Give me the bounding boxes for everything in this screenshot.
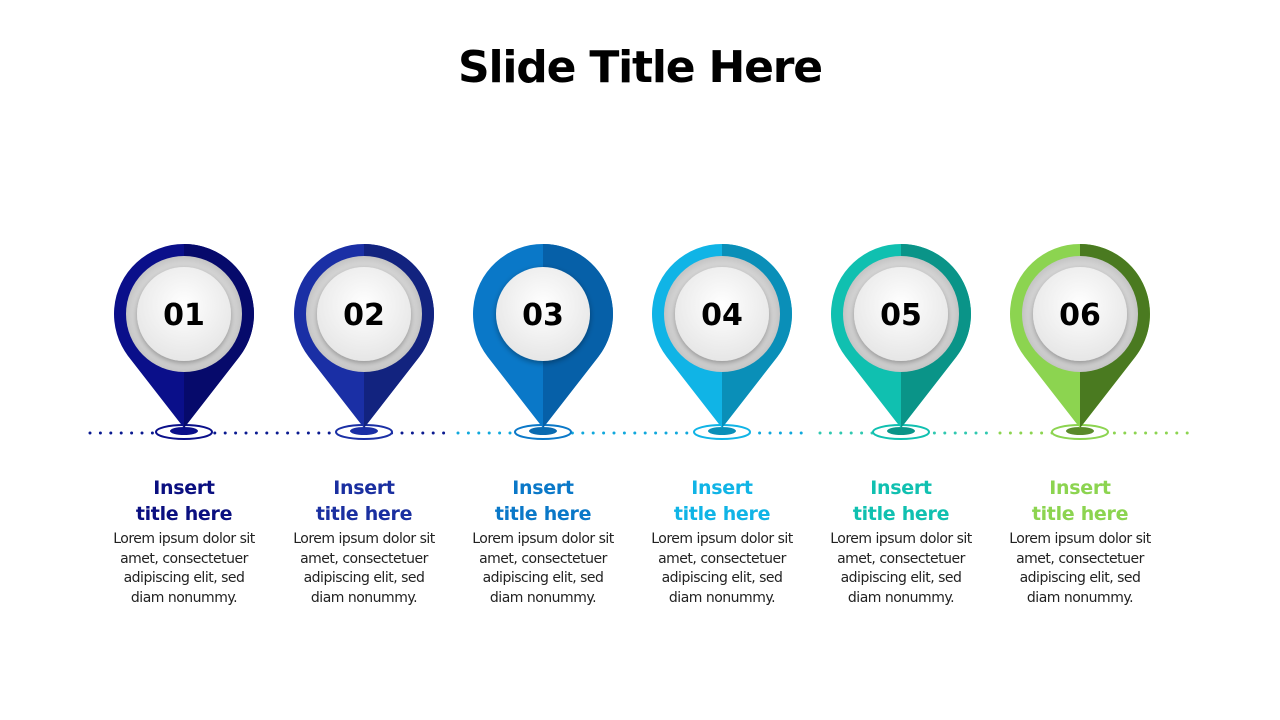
dotted line — [90, 432, 1192, 434]
pin 04 — [652, 244, 792, 439]
text block 02: Lorem ipsum dolor sit amet, consectetuer adipiscing elit, sed diam nonummy. — [293, 531, 435, 606]
text block 02: title here — [316, 503, 412, 525]
title: Slide Title Here — [458, 42, 822, 93]
text block 06: Insert — [1049, 477, 1111, 499]
text block 01: title here — [136, 503, 232, 525]
text block 03: title here — [495, 503, 591, 525]
text block 02: Insert — [333, 477, 395, 499]
pin 02 — [294, 244, 434, 439]
text block 01: Insert — [153, 477, 215, 499]
text block 03 — [472, 477, 614, 606]
text block 04: Lorem ipsum dolor sit amet, consectetuer adipiscing elit, sed diam nonummy. — [651, 531, 793, 606]
pin 04: 04 — [701, 298, 743, 333]
text block 06: title here — [1032, 503, 1128, 525]
pin 06: 06 — [1059, 298, 1101, 333]
pin 02: 02 — [343, 298, 385, 333]
text block 05 — [830, 477, 972, 606]
text block 01: Lorem ipsum dolor sit amet, consectetuer adipiscing elit, sed diam nonummy. — [113, 531, 255, 606]
pin 05 — [831, 244, 971, 439]
text block 04: Insert — [691, 477, 753, 499]
text block 05: Insert — [870, 477, 932, 499]
text block 06 — [1009, 477, 1151, 606]
text block 04: title here — [674, 503, 770, 525]
pin 06 — [1010, 244, 1150, 439]
pin 01: 01 — [163, 298, 205, 333]
text block 04 — [651, 477, 793, 606]
pin 03 — [473, 244, 613, 439]
text block 06: Lorem ipsum dolor sit amet, consectetuer adipiscing elit, sed diam nonummy. — [1009, 531, 1151, 606]
text block 01 — [113, 477, 255, 606]
pin 05: 05 — [880, 298, 922, 333]
text block 03: Insert — [512, 477, 574, 499]
text block 02 — [293, 477, 435, 606]
text block 03: Lorem ipsum dolor sit amet, consectetuer adipiscing elit, sed diam nonummy. — [472, 531, 614, 606]
pin 03: 03 — [522, 298, 564, 333]
text block 05: title here — [853, 503, 949, 525]
pin 01 — [114, 244, 254, 439]
text block 05: Lorem ipsum dolor sit amet, consectetuer adipiscing elit, sed diam nonummy. — [830, 531, 972, 606]
